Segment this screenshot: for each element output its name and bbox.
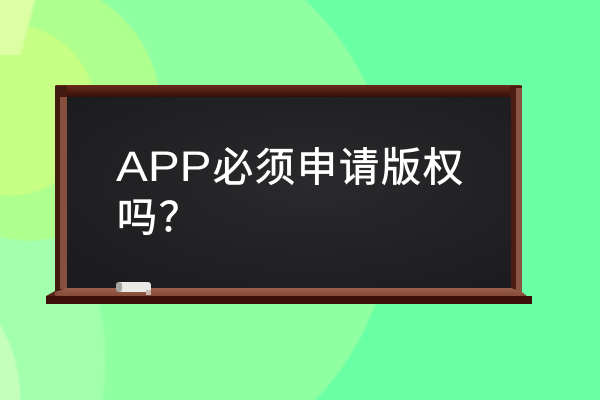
frame right <box>510 86 522 294</box>
chalkboard surface <box>67 97 511 288</box>
frame bottom ledge <box>46 288 532 304</box>
title line 1: 必须申请版权 <box>213 135 465 193</box>
title line 1: APP <box>116 143 212 191</box>
title line 2: 吗？ <box>117 185 201 243</box>
chalk <box>116 282 151 295</box>
frame top <box>55 85 522 98</box>
frame left <box>55 86 67 294</box>
